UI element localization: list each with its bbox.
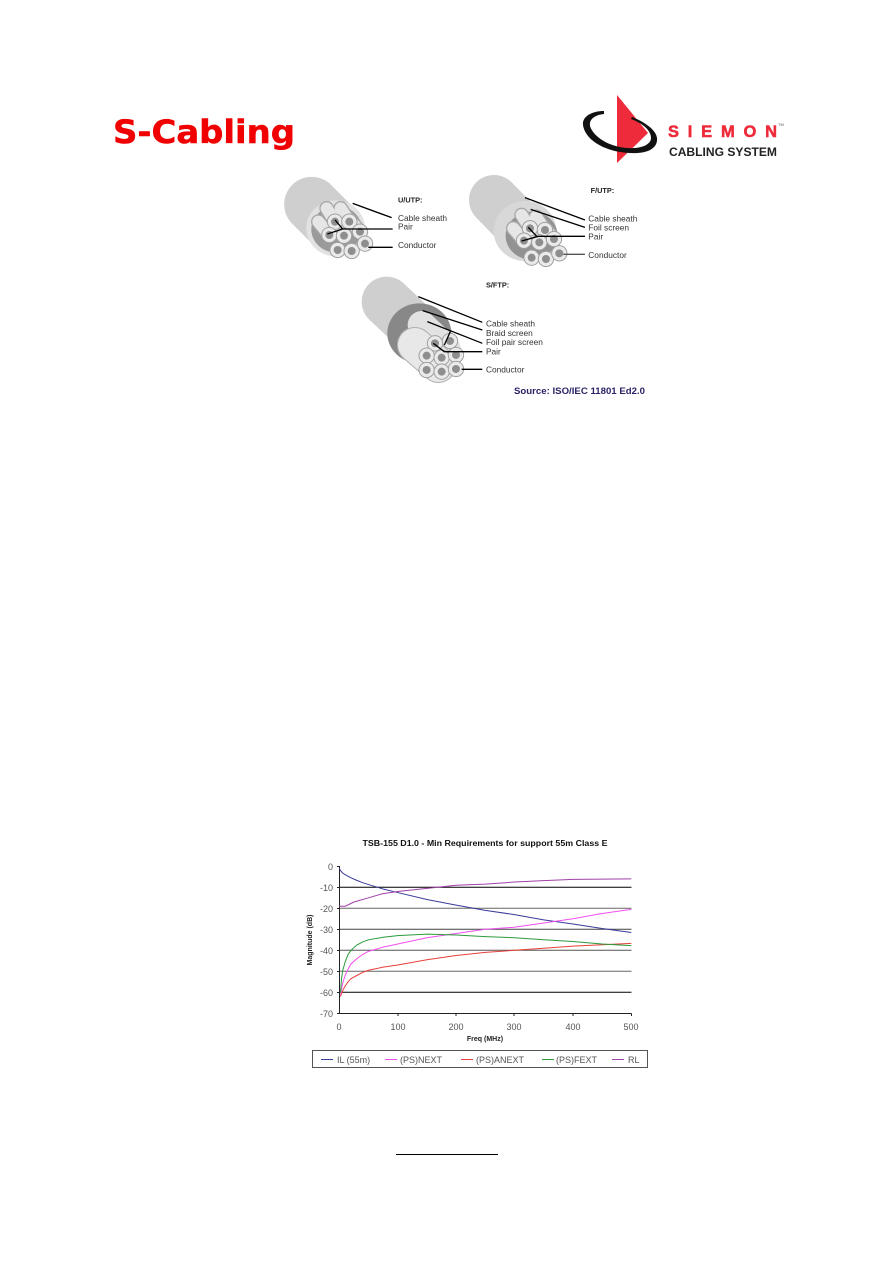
legend: (PS)NEXT bbox=[400, 1055, 443, 1065]
cable: F/UTP: Cable sheath bbox=[588, 214, 638, 224]
x axis labels bbox=[336, 1022, 639, 1032]
y axis title: Magnitude (dB) bbox=[307, 915, 314, 965]
x axis labels: 400 bbox=[565, 1022, 581, 1032]
logo: Siemon Cabling System bbox=[583, 95, 784, 163]
y axis labels: -20 bbox=[320, 904, 333, 914]
x axis labels: 300 bbox=[506, 1022, 522, 1032]
cable: U/UTP: Conductor bbox=[398, 240, 437, 250]
chart: TSB-155 minimum requirements bbox=[307, 838, 648, 1068]
cable: S/FTP bbox=[387, 281, 543, 379]
y axis labels: -50 bbox=[320, 967, 333, 977]
cable: F/UTP: Pair bbox=[588, 232, 603, 242]
y axis labels: -10 bbox=[320, 883, 333, 893]
x axis labels: 0 bbox=[336, 1022, 342, 1032]
grid lines bbox=[339, 887, 632, 992]
curve: IL (55m) bbox=[339, 868, 631, 932]
logo wordmark: SIEMON bbox=[668, 123, 777, 141]
x axis labels: 200 bbox=[448, 1022, 464, 1032]
cable: U/UTP: Pair bbox=[398, 221, 413, 231]
curve: (PS)NEXT bbox=[340, 909, 631, 996]
y axis labels: -40 bbox=[320, 946, 333, 956]
footnote rule bbox=[396, 1154, 498, 1156]
x axis title: Freq (MHz) bbox=[467, 1036, 503, 1043]
logo icon: red diamond and black ring bbox=[583, 95, 657, 163]
cable: F/UTP: Foil screen bbox=[588, 222, 629, 232]
curve: (PS)FEXT bbox=[340, 934, 631, 992]
y axis labels: -60 bbox=[320, 988, 333, 998]
legend: RL bbox=[628, 1055, 640, 1065]
cable: S/FTP: Cable sheath bbox=[486, 318, 535, 328]
cable: U/UTP: U/UTP: bbox=[398, 195, 422, 204]
y axis labels: 0 bbox=[328, 862, 333, 872]
chart title: TSB-155 D1.0 - Min Requirements for support 55m Class E bbox=[362, 838, 608, 848]
cable: S/FTP: Foil pair screen bbox=[486, 337, 543, 347]
cable: S/FTP: Pair bbox=[486, 347, 501, 357]
cable: F/UTP bbox=[494, 186, 638, 267]
cable: S/FTP: Braid screen bbox=[486, 328, 533, 338]
curve: (PS)ANEXT bbox=[340, 943, 631, 996]
cable: U/UTP bbox=[306, 195, 447, 259]
legend: IL (55m) bbox=[337, 1055, 370, 1065]
curve: RL bbox=[339, 879, 631, 906]
source caption: Source: ISO/IEC 11801 Ed2.0 bbox=[514, 386, 645, 397]
y axis labels bbox=[320, 862, 333, 1019]
y axis labels: -30 bbox=[320, 925, 333, 935]
legend: (PS)FEXT bbox=[556, 1055, 598, 1065]
cable: U/UTP: Cable sheath bbox=[398, 213, 447, 223]
y axis labels: -70 bbox=[320, 1009, 333, 1019]
cable: S/FTP: S/FTP: bbox=[486, 281, 509, 290]
cable: F/UTP: Conductor bbox=[588, 250, 627, 260]
logo tagline: CABLING SYSTEM bbox=[669, 147, 777, 159]
cable: F/UTP: F/UTP: bbox=[591, 186, 614, 195]
x axis labels: 500 bbox=[623, 1022, 639, 1032]
legend bbox=[312, 1050, 648, 1068]
axes bbox=[337, 866, 632, 1016]
data curves bbox=[339, 868, 631, 996]
cable diagrams bbox=[306, 186, 638, 379]
legend: (PS)ANEXT bbox=[476, 1055, 525, 1065]
cable: S/FTP: Conductor bbox=[486, 364, 525, 374]
x axis labels: 100 bbox=[390, 1022, 406, 1032]
logo trademark: TM bbox=[778, 122, 784, 127]
title: S-Cabling bbox=[113, 113, 295, 151]
